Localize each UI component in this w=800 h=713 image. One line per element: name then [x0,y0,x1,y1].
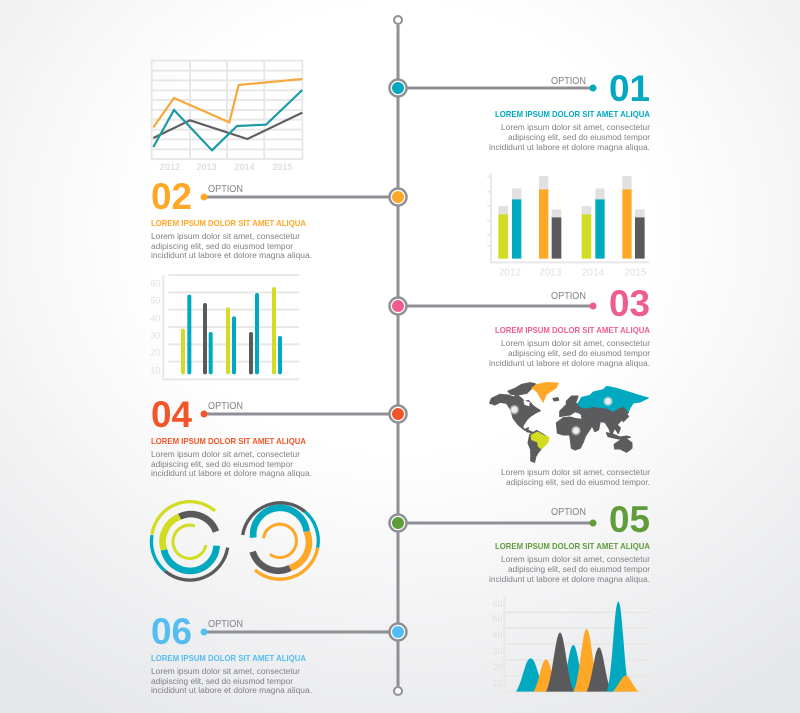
axis labels: 60 [493,599,503,609]
number 03: 03 [609,283,650,324]
body 03: Lorem ipsum dolor sit amet, consectetur [501,338,650,348]
step 03 [390,283,650,368]
dark bars [205,305,251,372]
connector 05 [390,514,596,532]
body 06: Lorem ipsum dolor sit amet, consectetur [151,666,300,676]
connector 02 [200,188,406,206]
map caption: Lorem ipsum dolor sit amet, consectetur [501,467,650,477]
map caption: adipiscing elit, sed do eiusmod tempor. [506,477,650,487]
step 02 [151,176,406,260]
body 04: Lorem ipsum dolor sit amet, consectetur [151,449,300,459]
body 06: adipiscing elit, sed do eiusmod tempor [151,676,293,686]
dark bars [552,217,645,259]
body 05: incididunt ut labore et dolore magna aliqua. [489,574,650,584]
body 02: Lorem ipsum dolor sit amet, consectetur [151,231,300,241]
inner ring [263,524,296,558]
option label 02: OPTION [208,184,243,195]
map caption [501,467,650,487]
Brazil [531,432,549,449]
lime bars [183,289,274,372]
body 01 [489,122,650,152]
year labels: 2015 [272,162,292,172]
axis labels: 20 [493,662,503,672]
axis labels: 50 [493,614,503,624]
connector 03 [390,298,596,314]
peak 8 [613,676,639,692]
axis labels: 60 [150,278,160,288]
Greenland [531,382,559,403]
body 01: incididunt ut labore et dolore magna aliqua. [489,142,650,152]
body 02: adipiscing elit, sed do eiusmod tempor [151,241,293,251]
axis labels: 30 [150,330,160,340]
number 05: 05 [609,499,650,540]
peak 1 [516,658,545,692]
Eurasia, Africa, Australia [557,396,632,452]
body 01: adipiscing elit, sed do eiusmod tempor [508,132,650,142]
step 01 [390,68,650,152]
number 02: 02 [151,176,192,217]
year labels [499,267,647,278]
step 06 [151,611,406,695]
connector 06 [200,624,406,640]
area peak chart [493,597,650,692]
heading 03: LOREM IPSUM DOLOR SIT AMET ALIQUA [495,325,650,335]
body 02 [151,231,312,260]
eastern hemisphere [557,386,648,452]
option label 06: OPTION [208,619,243,630]
body 03: adipiscing elit, sed do eiusmod tempor [508,348,650,358]
peak 5 [573,629,600,692]
step 04 [151,394,406,478]
option label 03: OPTION [551,291,586,302]
body 04: incididunt ut labore et dolore magna aliqua. [151,468,312,478]
year labels: 2014 [582,267,605,278]
line chart [152,61,302,172]
number 06: 06 [151,611,192,652]
Hudson Bay [523,401,530,406]
heading 06: LOREM IPSUM DOLOR SIT AMET ALIQUA [151,653,306,663]
year labels: 2012 [160,162,180,172]
stacked bar chart [487,173,650,278]
year labels: 2014 [235,162,255,172]
body 06 [151,666,312,695]
inner ring [173,525,206,558]
marker: Russia [603,396,613,406]
heading 02: LOREM IPSUM DOLOR SIT AMET ALIQUA [151,218,306,228]
year labels: 2013 [539,267,562,278]
body 04: adipiscing elit, sed do eiusmod tempor [151,459,293,469]
axis labels [150,278,160,375]
connector 01 [390,80,596,96]
body 03: incididunt ut labore et dolore magna aliqua. [489,358,650,368]
year labels: 2012 [499,267,522,278]
year labels [160,162,292,172]
heading 01: LOREM IPSUM DOLOR SIT AMET ALIQUA [495,109,650,119]
body 04 [151,449,312,478]
body 02: incididunt ut labore et dolore magna aliqua. [151,250,312,260]
axis labels: 10 [150,365,160,375]
option label 01: OPTION [551,76,586,87]
western hemisphere [490,382,559,462]
middle rings [253,508,309,571]
peak 3 [546,633,574,692]
peak 6 [587,647,612,692]
Americas [490,383,558,462]
bar tops [498,176,645,217]
body 01: Lorem ipsum dolor sit amet, consectetur [501,122,650,132]
axis labels: 40 [493,630,503,640]
body 05 [489,554,650,584]
teal bars [512,199,605,259]
axis labels [493,599,503,688]
option label 04: OPTION [208,401,243,412]
Russia [578,386,648,412]
step 05 [390,499,650,584]
middle rings [163,514,217,571]
teal series [153,90,302,150]
body 05: Lorem ipsum dolor sit amet, consectetur [501,554,650,564]
thin bar chart [150,275,299,379]
radial chart right [243,503,318,579]
option label 05: OPTION [551,507,586,518]
axis labels: 20 [150,347,160,357]
axis labels: 40 [150,313,160,323]
body 05: adipiscing elit, sed do eiusmod tempor [508,564,650,574]
body 06: incididunt ut labore et dolore magna aliqua. [151,685,312,695]
peak 2 [533,659,559,692]
number 01: 01 [609,68,650,109]
world map [490,382,648,462]
marker: North America [509,405,519,415]
timeline axis [394,16,402,695]
body 03 [489,338,650,368]
orange series [153,79,302,127]
dark series [153,113,302,139]
peak 7 [607,602,630,692]
axis labels: 10 [493,678,503,688]
heading 05: LOREM IPSUM DOLOR SIT AMET ALIQUA [495,541,650,551]
radial chart left [151,502,228,580]
marker: Africa [571,426,581,436]
teal bars [189,295,280,372]
number 04: 04 [151,394,192,435]
axis labels: 50 [150,296,160,306]
year labels: 2013 [197,162,217,172]
outer rings [243,503,318,579]
lime bars [498,214,591,259]
axis labels: 30 [493,646,503,656]
peak 4 [562,645,586,692]
year labels: 2015 [624,267,647,278]
orange bars [539,189,632,259]
connector 04 [200,406,406,422]
outer rings [151,502,228,580]
heading 04: LOREM IPSUM DOLOR SIT AMET ALIQUA [151,436,306,446]
